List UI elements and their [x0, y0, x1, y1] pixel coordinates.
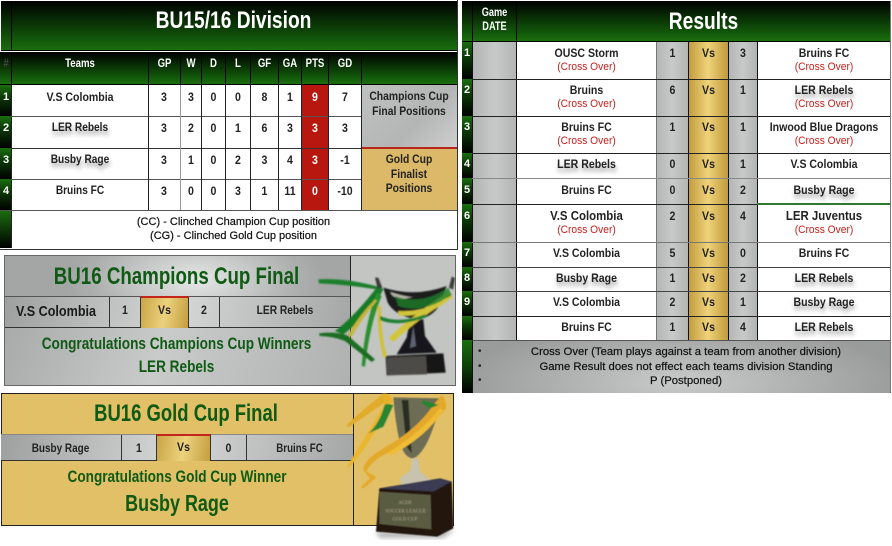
- note text: [531, 346, 841, 387]
- header band: [462, 1, 890, 42]
- team: Bruins FC: Bruins FC: [276, 441, 323, 455]
- row 4: Bruins FC: 1: [262, 184, 267, 198]
- game 6: V.S Colombia: [550, 208, 623, 223]
- game 6: 4: [740, 209, 746, 223]
- row 1: V.S Colombia: 0: [235, 90, 241, 104]
- row 3: Busby Rage: 3: [161, 153, 167, 167]
- row 1: V.S Colombia: 8: [262, 90, 267, 104]
- game 2: 1: [740, 83, 746, 97]
- row 2: LER Rebels: 3: [287, 121, 293, 135]
- game 2: LER Rebels: [795, 83, 853, 97]
- row 1: V.S Colombia: 1: [287, 90, 293, 104]
- icon: gold cup trophy: ACER: [398, 501, 412, 506]
- game 9: 1: [740, 295, 746, 309]
- row 4: Bruins FC: 3: [161, 184, 167, 198]
- score 2: 2: [201, 303, 207, 317]
- game 3: (Cross Over): [795, 135, 853, 147]
- text: congratulations: Congratulations Gold Cup Winner: [68, 467, 286, 486]
- panel: BU15/16 Division standings: [0, 0, 458, 250]
- column heading: W: W: [186, 56, 196, 70]
- game 7: 0: [740, 246, 746, 260]
- row 2: LER Rebels: 3: [342, 121, 348, 135]
- icon: green and gold ribbon trophy: [318, 276, 456, 376]
- game 7: Vs: [702, 246, 715, 260]
- game 5: Vs: [702, 183, 715, 197]
- row 2: LER Rebels: 3: [161, 121, 167, 135]
- game 1: (Cross Over): [795, 61, 853, 73]
- row 3: Busby Rage: -1: [340, 153, 350, 167]
- game 7: Bruins FC: [799, 246, 849, 260]
- score 1: 1: [122, 303, 128, 317]
- game 10: 4: [740, 320, 746, 334]
- row 1: V.S Colombia: V.S Colombia: [46, 90, 114, 104]
- heading: Results: Results: [669, 8, 738, 35]
- game 2: 6: [670, 83, 675, 97]
- game 6: Vs: [702, 209, 715, 223]
- label text: Final Positions: [372, 106, 446, 118]
- column heading: L: L: [235, 56, 241, 70]
- grid lines: [11, 85, 12, 248]
- game 5: 0: [670, 183, 675, 197]
- row 2: LER Rebels: 1: [235, 121, 241, 135]
- row 1: V.S Colombia: 9: [312, 90, 318, 104]
- team: LER Rebels: LER Rebels: [257, 303, 313, 317]
- row 3: Busby Rage: 4: [287, 153, 293, 167]
- game 3: 1: [670, 120, 675, 134]
- game 7: 5: [670, 246, 675, 260]
- row 4: Bruins FC: 11: [284, 184, 296, 198]
- game 3: 3: [464, 121, 470, 133]
- column heading: Teams: Teams: [65, 56, 95, 70]
- Vs cell: [156, 434, 211, 461]
- column heading: #: #: [3, 56, 9, 70]
- game 1: Bruins FC: [799, 46, 849, 60]
- row 1: V.S Colombia: 3: [161, 90, 167, 104]
- game 8: Vs: [702, 271, 715, 285]
- game 2: (Cross Over): [795, 98, 853, 110]
- team: V.S Colombia: V.S Colombia: [16, 303, 96, 320]
- row 2: LER Rebels: LER Rebels: [52, 122, 108, 134]
- game 5: [464, 183, 857, 202]
- game 8: 1: [670, 271, 675, 285]
- game 8: 2: [740, 271, 746, 285]
- text: winner name: Busby Rage: [125, 490, 229, 516]
- row 1: V.S Colombia: 7: [342, 90, 348, 104]
- row 1: V.S Colombia: 1: [3, 91, 9, 103]
- game 8: [464, 271, 856, 290]
- label text: Finalist: [391, 168, 427, 180]
- game 5: Bruins FC: [561, 183, 612, 197]
- note bullets: •: [478, 375, 482, 386]
- text: winners: LER Rebels: [139, 357, 214, 376]
- score 2: 0: [226, 441, 231, 455]
- row 3: Busby Rage: 1: [188, 153, 194, 167]
- row 2: LER Rebels: 3: [312, 121, 318, 135]
- game 9: V.S Colombia: [553, 295, 620, 309]
- footnote: clinched key: [137, 216, 330, 242]
- icon: gold cup trophy: GOLD CUP: [393, 518, 418, 523]
- heading: BU16 Gold Cup Final: [94, 400, 278, 427]
- column heading: Game DATE: Game: [482, 7, 507, 19]
- game 10: 1: [670, 320, 675, 334]
- row 2: LER Rebels: 2: [188, 121, 194, 135]
- text: winners: [42, 334, 311, 376]
- game 1: [464, 46, 853, 73]
- label text: Positions: [386, 183, 432, 195]
- column heading: Game DATE: DATE: [482, 21, 507, 33]
- row 3: Busby Rage: 3: [312, 153, 318, 167]
- Vs cell: Vs: [177, 440, 190, 454]
- game 1: (Cross Over): [557, 61, 616, 73]
- notes strip: [462, 340, 472, 393]
- panel: BU16 Gold Cup Final: [1, 393, 454, 526]
- title band: [1, 1, 457, 51]
- row 2: LER Rebels: 6: [262, 121, 267, 135]
- game 3: Vs: [702, 120, 715, 134]
- game 4: 1: [740, 157, 746, 171]
- game 8: LER Rebels: [795, 271, 853, 285]
- Vs cell: Vs: [158, 303, 171, 317]
- Gold Cup Finalist Positions: [361, 148, 457, 210]
- game 2: Vs: [702, 83, 715, 97]
- row 4: Bruins FC: [3, 184, 353, 198]
- row 4: Bruins FC: 0: [188, 184, 194, 198]
- column heading: GP: GP: [158, 56, 171, 70]
- row 1: V.S Colombia: 3: [188, 90, 194, 104]
- row 1: V.S Colombia: [3, 90, 348, 104]
- row 4: Bruins FC: 0: [312, 184, 318, 198]
- game 4: 4: [464, 158, 470, 170]
- game 6: (Cross Over): [795, 224, 853, 236]
- game 3: Bruins FC: [561, 120, 612, 134]
- text: winners: Congratulations Champions Cup Winners: [42, 334, 311, 353]
- game 6: 2: [670, 209, 675, 223]
- row 3: Busby Rage: 3: [3, 154, 9, 166]
- game 4: V.S Colombia: [790, 157, 858, 171]
- game 1: Vs: [702, 46, 715, 60]
- note bullets: •: [478, 360, 482, 372]
- note bullets: [478, 346, 482, 386]
- game 3: [464, 120, 878, 147]
- game 9: 9: [464, 296, 470, 308]
- game 6: (Cross Over): [557, 224, 616, 236]
- row 4: Bruins FC: 3: [235, 184, 241, 198]
- game 10: LER Rebels: [795, 320, 853, 334]
- game 1: OUSC Storm: [555, 46, 618, 60]
- column heading: PTS: PTS: [306, 56, 324, 70]
- column heading: Game DATE: [482, 7, 507, 33]
- game 9: 2: [670, 295, 675, 309]
- rank strip: [0, 85, 11, 116]
- label text: [369, 91, 449, 118]
- match row: [5, 297, 351, 328]
- game 5: Busby Rage: [793, 183, 855, 197]
- icon: gold cup trophy: [346, 392, 454, 540]
- row 4: Bruins FC: -10: [337, 184, 353, 198]
- note text: P (Postponed): [650, 375, 722, 387]
- heading: BU15/16 Division: BU15/16 Division: [156, 7, 311, 34]
- score 1: 1: [136, 441, 142, 455]
- game 8: Busby Rage: [556, 271, 617, 285]
- game 1: 1: [464, 47, 470, 59]
- column heading: GA: GA: [283, 56, 297, 70]
- label text: [386, 154, 432, 195]
- game 3: 1: [740, 120, 746, 134]
- game 10: Bruins FC: [561, 320, 612, 334]
- notes panel: [472, 340, 890, 393]
- game 10: [561, 320, 856, 338]
- game 6: LER Juventus: [786, 208, 862, 223]
- panel: BU16 Champions Cup Final: [4, 255, 456, 386]
- footnote: clinched key: (CC) - Clinched Champion Cup position: [137, 216, 330, 228]
- game 10: Vs: [702, 320, 715, 334]
- game 3: Inwood Blue Dragons: [770, 120, 878, 134]
- row 2: LER Rebels: 0: [211, 121, 216, 135]
- game 4: 0: [670, 157, 675, 171]
- game 6: [464, 208, 862, 236]
- game 9: [464, 295, 857, 314]
- game 9: Busby Rage: [793, 295, 855, 309]
- heading: BU16 Champions Cup Final: [54, 263, 299, 290]
- game 3: (Cross Over): [557, 135, 616, 147]
- rank strip: [462, 42, 890, 340]
- row 3: Busby Rage: 0: [211, 153, 216, 167]
- game 5: 5: [464, 184, 470, 196]
- game 4: LER Rebels: [557, 157, 616, 171]
- Champions Cup Final Positions: [361, 85, 457, 148]
- note text: Game Result does not effect each teams division Standing: [539, 360, 833, 372]
- match row: [1, 434, 353, 461]
- row 3: Busby Rage: 3: [262, 153, 267, 167]
- game 4: Vs: [702, 157, 715, 171]
- column heading: GD: GD: [338, 56, 352, 70]
- row 4: Bruins FC: 0: [211, 184, 216, 198]
- row 3: Busby Rage: 2: [235, 153, 241, 167]
- row 4: Bruins FC: Bruins FC: [56, 185, 104, 197]
- game 1: 1: [670, 46, 675, 60]
- row 3: Busby Rage: [3, 153, 350, 172]
- note bullets: •: [478, 346, 482, 357]
- game 7: 7: [464, 247, 470, 259]
- game 2: [464, 83, 856, 110]
- icon: gold cup trophy: SOCCER LEAGUE: [385, 509, 426, 514]
- label text: Gold Cup: [386, 154, 432, 166]
- game 2: Bruins: [570, 83, 603, 97]
- column heading: D: D: [210, 56, 217, 70]
- row 3: Busby Rage: Busby Rage: [51, 154, 109, 166]
- column heading: GF: GF: [258, 56, 271, 70]
- row 2: LER Rebels: [3, 121, 348, 138]
- row 1: V.S Colombia: 0: [211, 90, 216, 104]
- game 6: 6: [464, 210, 470, 222]
- game 2: 2: [464, 84, 470, 96]
- note text: Cross Over (Team plays against a team from another division): [531, 346, 841, 358]
- game 1: 3: [740, 46, 746, 60]
- label text: Champions Cup: [369, 91, 449, 103]
- game 9: Vs: [702, 295, 715, 309]
- title band: [5, 256, 351, 297]
- game 7: V.S Colombia: [553, 246, 620, 260]
- game 2: (Cross Over): [557, 98, 616, 110]
- row 2: LER Rebels: 2: [3, 122, 9, 134]
- team: Busby Rage: Busby Rage: [32, 441, 89, 455]
- congratulations block: [5, 328, 350, 385]
- row 4: Bruins FC: 4: [3, 185, 9, 197]
- game 4: [464, 157, 858, 174]
- game 7: [464, 246, 849, 260]
- PTS column: [301, 85, 328, 210]
- Vs cell: [140, 296, 189, 328]
- game 5: 2: [740, 183, 746, 197]
- game 8: 8: [464, 272, 470, 284]
- footnote: clinched key: (CG) - Clinched Gold Cup position: [150, 230, 317, 242]
- header row: [0, 52, 457, 85]
- panel: Results: [462, 1, 891, 393]
